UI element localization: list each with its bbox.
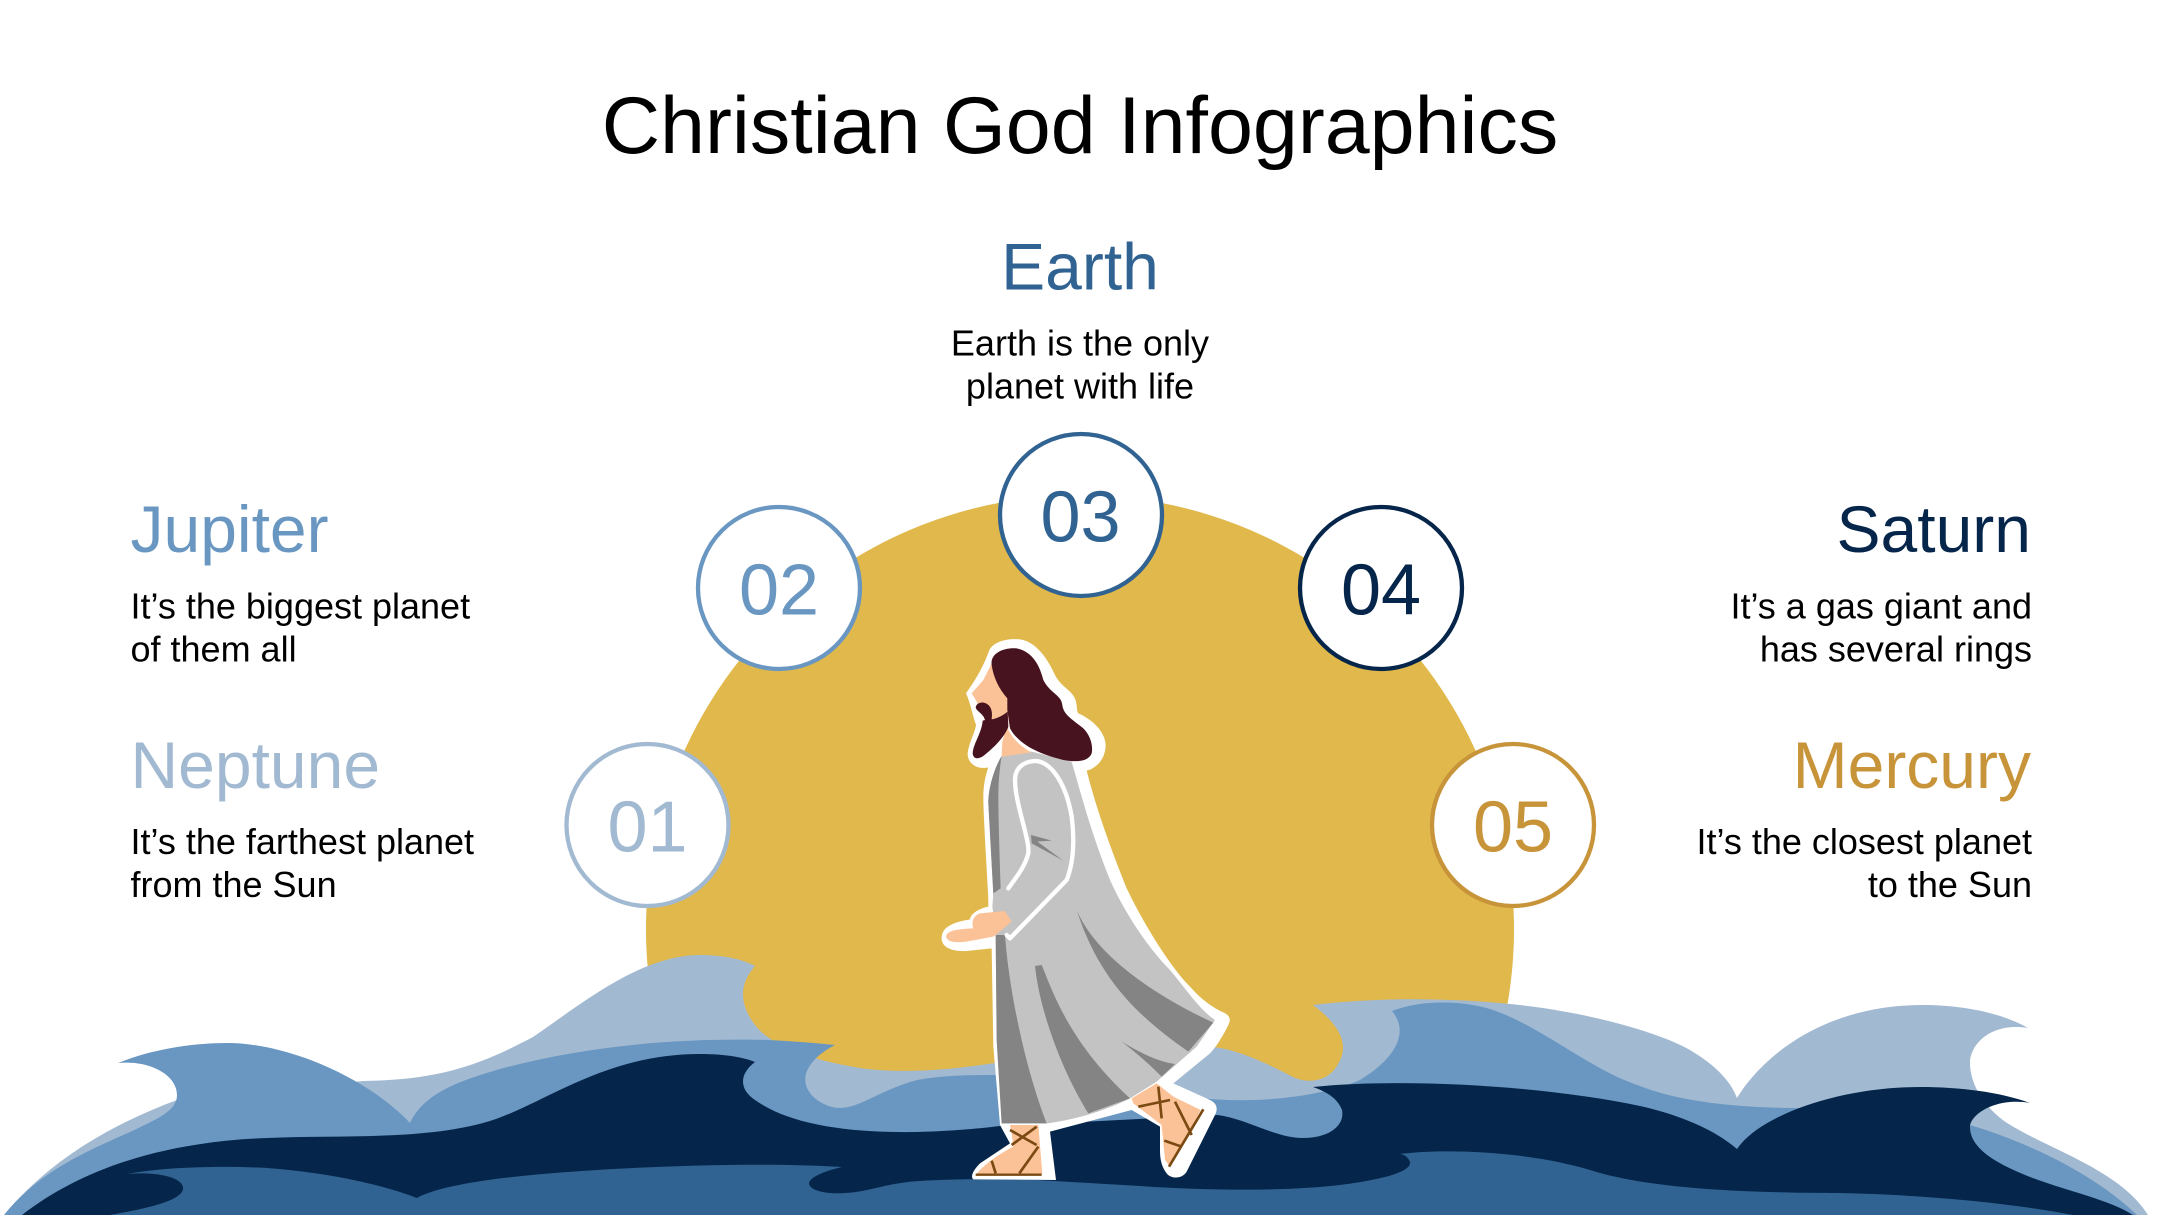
wave: dark navy layer <box>22 1054 2133 1215</box>
ocean waves <box>4 955 2148 1215</box>
back sandal <box>1132 1083 1203 1167</box>
text: Neptune description: It’s the farthest planet <box>130 821 474 862</box>
hair <box>992 648 1092 761</box>
sleeve fold <box>1031 835 1063 861</box>
text: Jupiter description: It’s the biggest planet <box>130 586 470 626</box>
neck and face <box>972 663 1032 757</box>
sleeve cuff <box>992 888 1017 935</box>
panel: Neptune <box>130 728 474 905</box>
circle 01: 01 <box>607 788 688 868</box>
circle 01 <box>566 744 728 906</box>
robe <box>988 752 1215 1123</box>
circle 02: 02 <box>739 550 819 630</box>
wave: front blue layer <box>110 1151 2073 1215</box>
panel: Jupiter <box>130 492 470 670</box>
wave: mid blue layer <box>4 1002 2137 1215</box>
robe fold: back <box>1077 910 1213 1077</box>
walking figure <box>942 639 1230 1180</box>
text: Earth description: planet with life <box>966 366 1194 406</box>
circle 04: 04 <box>1341 550 1421 630</box>
circle 02 <box>698 507 860 669</box>
heading: Mercury: Mercury <box>1793 728 2031 802</box>
panel: Earth <box>951 230 1209 406</box>
circle 05 <box>1432 744 1594 906</box>
hand <box>946 911 1012 942</box>
wave: light back layer <box>4 955 2148 1215</box>
heading: Earth: Earth <box>1001 230 1159 304</box>
sleeve outline <box>1007 761 1073 938</box>
front sandal <box>976 1125 1042 1175</box>
text: Mercury description: to the Sun <box>1868 864 2032 905</box>
text: Jupiter description: of them all <box>130 628 297 670</box>
heading: Saturn: Saturn <box>1837 492 2031 566</box>
circle 03 <box>1000 434 1162 596</box>
sun <box>646 495 1514 1100</box>
circle 05: 05 <box>1473 788 1553 868</box>
robe fold: centre <box>1035 965 1130 1113</box>
heading: Jupiter: Jupiter <box>130 492 329 566</box>
text: Saturn description: has several rings <box>1760 628 2032 670</box>
circle 04 <box>1300 507 1462 669</box>
text: Saturn description: It’s a gas giant and <box>1730 586 2032 626</box>
beard <box>973 702 1008 758</box>
text: Neptune description: from the Sun <box>130 864 337 905</box>
robe fold: front strip <box>988 756 1047 1123</box>
figure white outline <box>942 639 1230 1180</box>
panel: Mercury <box>1696 728 2032 905</box>
heading: Neptune: Neptune <box>130 728 380 802</box>
panel: Saturn <box>1730 492 2032 670</box>
text: Mercury description: It’s the closest planet <box>1696 821 2032 862</box>
circle 03: 03 <box>1040 478 1121 558</box>
text: Earth description: Earth is the only <box>951 322 1209 364</box>
title: Christian God Infographics <box>602 81 1558 171</box>
